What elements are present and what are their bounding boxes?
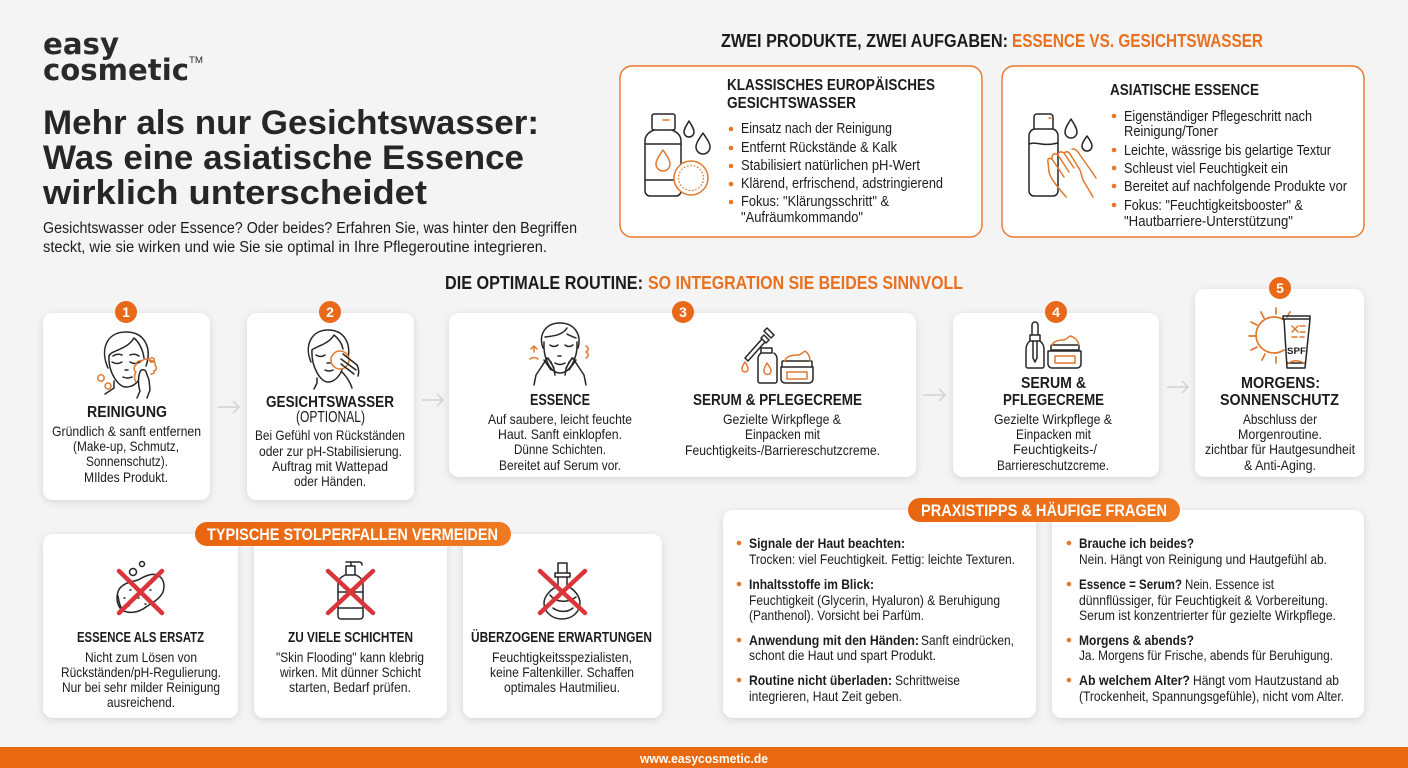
text: step 1: REINIGUNG <box>87 404 167 421</box>
logo <box>43 27 203 87</box>
panel: step 4 Serum & Pflegecreme <box>953 301 1159 477</box>
text: step 5: Morgenroutine. <box>1238 426 1322 442</box>
pill heading: Praxistipps <box>908 498 1180 522</box>
text: step 4: PFLEGECREME <box>1003 392 1104 409</box>
badge 5 <box>1269 277 1291 299</box>
icon: crossed pump bottle <box>328 562 373 619</box>
text: step 5: & Anti-Aging. <box>1244 457 1316 473</box>
text: step 5 <box>1205 375 1355 473</box>
text: Essence: ESSENCE <box>530 392 590 409</box>
icon: face with tapping hands <box>530 323 588 385</box>
text: Essence als Ersatz: Nur bei sehr milder Reinigung <box>62 679 220 695</box>
arrow <box>218 401 239 413</box>
panel: Praxistipps: Inhaltsstoffe im Blick: <box>749 576 874 592</box>
panel: Häufige Fragen: Nein. Essence ist <box>1185 576 1274 592</box>
text: Essence als Ersatz: Rückständen/pH-Regulierung. <box>61 664 221 680</box>
text: Essence als Ersatz: Nicht zum Lösen von <box>85 649 197 665</box>
pill heading: Stolperfallen <box>195 522 511 546</box>
heading: comparison <box>721 31 1263 51</box>
text: Überzogene Erwartungen: Feuchtigkeitsspezialisten, <box>492 649 632 665</box>
badge 4 <box>1045 301 1067 323</box>
text: step 4: SERUM & <box>1021 375 1086 392</box>
text: Essence: Bereitet auf Serum vor. <box>499 457 621 473</box>
text: Gesichtswasser facts: Entfernt Rückstände & Kalk <box>741 140 898 156</box>
text: step 5: MORGENS: <box>1241 375 1320 392</box>
text: Essence facts: Reinigung/Toner <box>1124 124 1218 140</box>
panel: Praxistipps: Routine nicht überladen: <box>749 672 892 688</box>
text: Essence facts: ASIATISCHE ESSENCE <box>1110 82 1259 99</box>
text: step 1: Sonnenschutz). <box>86 453 168 469</box>
panel: Häufige Fragen: dünnflüssiger, für Feuchtigkeit & Vorbereitung. <box>1079 592 1328 608</box>
panel: Praxistipps: Schrittweise <box>895 672 960 688</box>
text: Überzogene Erwartungen: ÜBERZOGENE ERWARTUNGEN <box>471 629 652 646</box>
panel: step 3 Essence + Serum <box>449 301 916 477</box>
panel: Häufige Fragen: Ab welchem Alter? <box>1079 672 1190 688</box>
text: step 1: MIldes Produkt. <box>84 469 168 485</box>
panel: Häufige Fragen: Ja. Morgens für Frische, abends für Beruhigung. <box>1079 647 1333 663</box>
text: Essence als Ersatz: ausreichend. <box>107 694 175 710</box>
panel: Praxistipps: integrieren, Haut Zeit geben. <box>749 688 902 704</box>
arrow <box>923 389 945 401</box>
text: Gesichtswasser facts <box>727 77 943 226</box>
title <box>42 104 539 212</box>
panel: Häufige Fragen: (Trockenheit, Spannungsgefühle), nicht vom Alter. <box>1079 688 1344 704</box>
text: step 2: oder Händen. <box>294 473 366 489</box>
text: Essence <box>488 392 632 473</box>
text: Essence facts: Leichte, wässrige bis gelartige Textur <box>1124 143 1331 159</box>
icon: crossed flask <box>540 563 585 619</box>
text: Gesichtswasser facts: GESICHTSWASSER <box>727 95 856 112</box>
icon: crossed sponge <box>117 562 164 613</box>
text: Serum & Pflegecreme: Einpacken mit <box>745 426 820 442</box>
icon: essence bottle with hands <box>1029 114 1096 197</box>
text: step 5: zichtbar für Hautgesundheit <box>1205 441 1355 457</box>
text: step 1: (Make-up, Schmutz, <box>73 438 179 454</box>
panel: Häufige Fragen: Morgens & abends? <box>1079 632 1194 648</box>
text: Serum & Pflegecreme: SERUM & PFLEGECREME <box>693 392 862 409</box>
intro text <box>43 220 577 256</box>
text: step 2: (OPTIONAL) <box>296 409 365 426</box>
panel: asiatische Essence <box>1002 66 1364 237</box>
text: step 2: GESICHTSWASSER <box>266 394 394 411</box>
badge 3: 3 <box>679 304 687 320</box>
text: Essence facts <box>1110 82 1347 230</box>
icon: toner bottle and cotton pad <box>645 114 710 196</box>
text: step 4 <box>994 375 1113 473</box>
text: Gesichtswasser facts: Klärend, erfrischend, adstringierend <box>741 176 943 192</box>
badge 2: 2 <box>326 304 334 320</box>
panel: Häufige Fragen: Brauche ich beides? <box>1079 535 1194 551</box>
panel: step 5 Sonnenschutz <box>1195 277 1364 477</box>
text: Zu viele Schichten: wirken. Mit dünner Schicht <box>279 664 421 680</box>
text: step 4: Feuchtigkeits-/ <box>1013 441 1097 457</box>
text: step 2: Auftrag mit Wattepad <box>272 458 388 474</box>
badge 5: 5 <box>1276 280 1284 296</box>
panel: Praxistipps: Sanft eindrücken, <box>921 632 1014 648</box>
panel: step 1 Reinigung <box>43 301 210 500</box>
heading: comparison: ZWEI PRODUKTE, ZWEI AUFGABEN: <box>721 31 1008 51</box>
icon: sun and SPF tube <box>1249 308 1310 368</box>
text: Gesichtswasser facts: Einsatz nach der Reinigung <box>741 121 892 137</box>
pill heading: Praxistipps: PRAXISTIPPS & HÄUFIGE FRAGEN <box>921 501 1167 520</box>
text: Zu viele Schichten: ZU VIELE SCHICHTEN <box>288 630 413 646</box>
text: step 4: Gezielte Wirkpflege & <box>994 411 1113 427</box>
panel: Praxistipps: schont die Haut und spart Produkt. <box>749 647 936 663</box>
panel: Praxistipps: Anwendung mit den Händen: <box>749 632 919 648</box>
panel: Überzogene Erwartungen <box>463 534 662 718</box>
heading: routine: SO INTEGRATION SIE BEIDES SINNVOLL <box>648 273 963 293</box>
text: Serum & Pflegecreme <box>685 392 880 458</box>
text: step 4: Barriereschutzcreme. <box>997 457 1109 473</box>
text: Essence als Ersatz <box>61 630 221 710</box>
panel: Praxistipps <box>723 510 1036 718</box>
title: Was eine asiatische Essence <box>43 139 524 177</box>
badge 4: 4 <box>1052 304 1060 320</box>
footer bar <box>0 747 1408 768</box>
pill heading: Stolperfallen: TYPISCHE STOLPERFALLEN VERMEIDEN <box>207 525 498 544</box>
text: Serum & Pflegecreme: Gezielte Wirkpflege & <box>723 411 842 427</box>
panel: Häufige Fragen <box>1052 510 1364 718</box>
text: Essence: Haut. Sanft einklopfen. <box>498 426 622 442</box>
icon: serum bottle and cream jar <box>1026 322 1081 368</box>
text: Essence facts: "Hautbarriere-Unterstützung" <box>1124 214 1293 230</box>
text: Essence facts: Schleust viel Feuchtigkeit ein <box>1124 161 1288 177</box>
panel: Praxistipps: Trocken: viel Feuchtigkeit. Fettig: leichte Texturen. <box>749 551 1015 567</box>
text: Gesichtswasser facts: KLASSISCHES EUROPÄISCHES <box>727 77 935 94</box>
text: step 2: Bei Gefühl von Rückständen <box>255 427 405 443</box>
text: Gesichtswasser facts: Fokus: "Klärungsschritt" & <box>741 194 889 210</box>
panel: Häufige Fragen: Serum ist konzentrierter für gezielte Wirkpflege. <box>1079 607 1336 623</box>
panel: Essence als Ersatz <box>43 534 238 718</box>
panel: step 2 Gesichtswasser <box>247 301 414 500</box>
title: Mehr als nur Gesichtswasser: <box>43 104 539 142</box>
panel: Häufige Fragen: Hängt vom Hautzustand ab <box>1193 672 1339 688</box>
badge 1: 1 <box>122 304 130 320</box>
panel: Praxistipps: Signale der Haut beachten: <box>749 535 905 551</box>
heading: comparison: ESSENCE VS. GESICHTSWASSER <box>1012 31 1263 51</box>
panel: Häufige Fragen: Nein. Hängt von Reinigung und Hautgefühl ab. <box>1079 551 1327 567</box>
heading: routine <box>445 273 963 293</box>
logo: cosmetic <box>43 53 189 87</box>
logo: TM <box>189 55 203 65</box>
panel: Praxistipps: (Panthenol). Vorsicht bei Parfüm. <box>749 607 924 623</box>
icon: sun and SPF tube: SPF <box>1287 346 1307 356</box>
panel: Praxistipps: Feuchtigkeit (Glycerin, Hyaluron) & Beruhigung <box>749 592 1000 608</box>
icon: dropper, serum and cream <box>742 328 813 383</box>
badge 3 <box>672 301 694 323</box>
title: wirklich unterscheidet <box>42 174 427 212</box>
text: Essence facts: Fokus: "Feuchtigkeitsbooster" & <box>1124 198 1303 214</box>
arrow <box>422 394 443 406</box>
text: step 4: Einpacken mit <box>1016 426 1091 442</box>
arrow <box>1167 381 1188 393</box>
text: Essence facts: Bereitet auf nachfolgende Produkte vor <box>1124 179 1347 195</box>
text: Überzogene Erwartungen: keine Faltenkiller. Schaffen <box>490 664 634 680</box>
panel: klassisches Gesichtswasser <box>620 66 982 237</box>
icon: face with cotton pad <box>308 330 359 389</box>
intro text: steckt, wie sie wirken und wie Sie sie optimal in Ihre Pflegeroutine integrieren. <box>43 239 547 256</box>
intro text: Gesichtswasser oder Essence? Oder beides? Erfahren Sie, was hinter den Begriffen <box>43 220 577 237</box>
text: Zu viele Schichten <box>276 630 424 695</box>
text: step 1 <box>52 404 201 485</box>
text: Gesichtswasser facts: Stabilisiert natürlichen pH-Wert <box>741 158 920 174</box>
text: Essence: Auf saubere, leicht feuchte <box>488 411 632 427</box>
text: step 2: oder zur pH-Stabilisierung. <box>259 443 402 459</box>
text: Serum & Pflegecreme: Feuchtigkeits-/Barriereschutzcreme. <box>685 442 880 458</box>
icon: face cleansing <box>98 332 156 398</box>
text: step 5: Abschluss der <box>1243 411 1317 427</box>
logo: easy <box>43 27 119 61</box>
footer bar: www.easycosmetic.de <box>639 752 768 766</box>
text: step 5: SONNENSCHUTZ <box>1220 392 1339 409</box>
text: Überzogene Erwartungen <box>471 629 652 695</box>
heading: routine: DIE OPTIMALE ROUTINE: <box>445 273 643 293</box>
text: Gesichtswasser facts: "Aufräumkommando" <box>741 210 863 226</box>
text: Essence: Dünne Schichten. <box>514 441 606 457</box>
badge 1 <box>115 301 137 323</box>
text: Essence als Ersatz: ESSENCE ALS ERSATZ <box>77 630 204 646</box>
panel: Zu viele Schichten <box>254 534 447 718</box>
badge 2 <box>319 301 341 323</box>
text: Zu viele Schichten: starten, Bedarf prüfen. <box>289 679 411 695</box>
text: Essence facts: Eigenständiger Pflegeschritt nach <box>1124 109 1312 125</box>
text: Überzogene Erwartungen: optimales Hautmilieu. <box>504 679 620 695</box>
panel: Häufige Fragen: Essence = Serum? <box>1079 576 1182 592</box>
text: step 1: Gründlich & sanft entfernen <box>52 423 201 439</box>
text: Zu viele Schichten: "Skin Flooding" kann klebrig <box>276 649 424 665</box>
text: step 2 <box>255 394 405 489</box>
